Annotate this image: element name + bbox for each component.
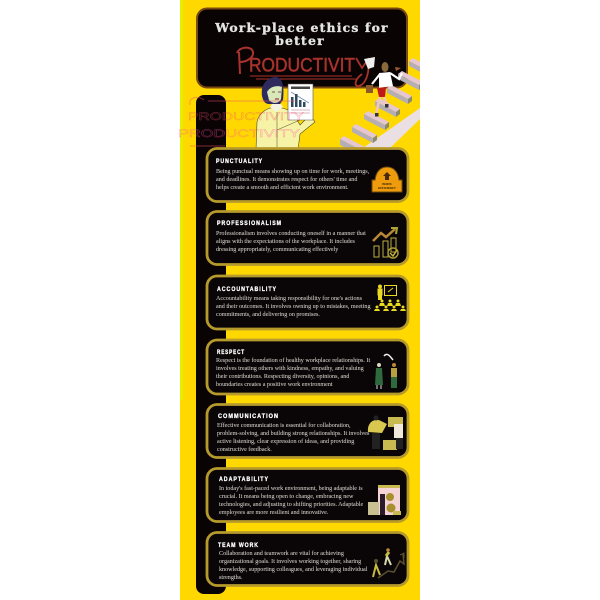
body text: Collaboration and teamwork are vital for achieving (219, 551, 344, 557)
heading: ADAPTABILITY (219, 476, 269, 483)
body text: commitments, and delivering on promises. (216, 312, 320, 318)
body text: Being punctual means showing up on time for work, meetings, (216, 169, 369, 175)
body text: boundaries creates a positive work environment (216, 382, 333, 388)
body text: Effective communication is essential for collaboration, (217, 423, 351, 429)
heading: COMMUNICATION (218, 413, 279, 420)
report sheet (288, 84, 313, 120)
body text: active listening, clear expression of ideas, and providing (217, 438, 354, 445)
ghost productivity glitch (178, 97, 305, 146)
ghost productivity glitch: PRODUCTIVITY (178, 128, 301, 140)
icon: growth chart (373, 228, 398, 258)
body text: Respect is the foundation of healthy workplace relationships. It (216, 358, 370, 364)
body text: their contributions. Respecting diversity, opinions, and (216, 374, 349, 380)
body text: Accountability means taking responsibility for one's actions (216, 296, 362, 302)
icon: running figure with flag (364, 57, 402, 116)
body text: involves treating others with kindness, empathy, and valuing (216, 366, 364, 372)
body text: knowledge, supporting colleagues, and leveraging individual (219, 567, 368, 573)
body text: helps create a smooth and efficient work environment. (216, 184, 349, 191)
icon: woman holding report (256, 77, 315, 150)
body text: aligns with the expectations of the workplace. It includes (216, 238, 356, 245)
title: better (275, 33, 325, 48)
title: Work-place ethics for (215, 20, 389, 35)
body text: constructive feedback. (217, 446, 272, 453)
heading: ACCOUNTABILITY (217, 286, 277, 293)
heading: TEAM WORK (218, 542, 259, 549)
panel: professionalism (207, 212, 408, 264)
panel: punctuality (207, 148, 408, 202)
panel: respect (207, 340, 408, 394)
body text: employees are more resilient and innovative. (219, 510, 329, 516)
body text: and their outcomes. It involves owning up to mistakes, meeting (216, 304, 371, 310)
yellow poster background (180, 0, 420, 600)
panel: adaptability (207, 468, 408, 522)
panel: team work (207, 532, 408, 586)
heading: RESPECT (217, 349, 245, 356)
heading: PROFESSIONALISM (217, 220, 282, 227)
icon: climbing arrow with people (373, 548, 404, 578)
stairs illustration (340, 58, 420, 148)
icon: people moving boxes (368, 416, 403, 450)
productivity neon word: RODUCTIVIT (249, 56, 355, 76)
header panel (197, 8, 407, 88)
icon: work efficiency badge (372, 167, 402, 192)
body text: problem-solving, and building strong relationships. It involves (217, 431, 370, 437)
panel: communication (207, 404, 408, 458)
heading: PUNCTUALITY (216, 158, 263, 165)
timeline spine (196, 95, 226, 594)
panel: accountability (207, 276, 408, 329)
body text: technologies, and adjusting to shifting priorities. Adaptable (219, 501, 363, 508)
body text: organizational goals. It involves working together, sharing (219, 559, 361, 565)
icon: work efficiency badge: WORK (382, 182, 393, 186)
productivity neon word (237, 48, 369, 86)
icon: work efficiency badge: EFFICIENCY (378, 186, 396, 190)
body text: strengths. (219, 575, 243, 581)
icon: two people talking (375, 354, 397, 389)
body text: and deadlines. It demonstrates respect for others' time and (216, 176, 357, 183)
icon: presenter and audience (374, 284, 406, 311)
ghost productivity glitch: PRODUCTIVITY (188, 111, 305, 123)
icon: calendar and charts (368, 485, 401, 515)
body text: dressing appropriately, communicating effectively (216, 246, 339, 253)
body text: crucial. It means being open to change, embracing new (219, 494, 354, 500)
body text: In today's fast-paced work environment, being adaptable is (219, 486, 363, 492)
body text: Professionalism involves conducting oneself in a manner that (216, 231, 366, 237)
